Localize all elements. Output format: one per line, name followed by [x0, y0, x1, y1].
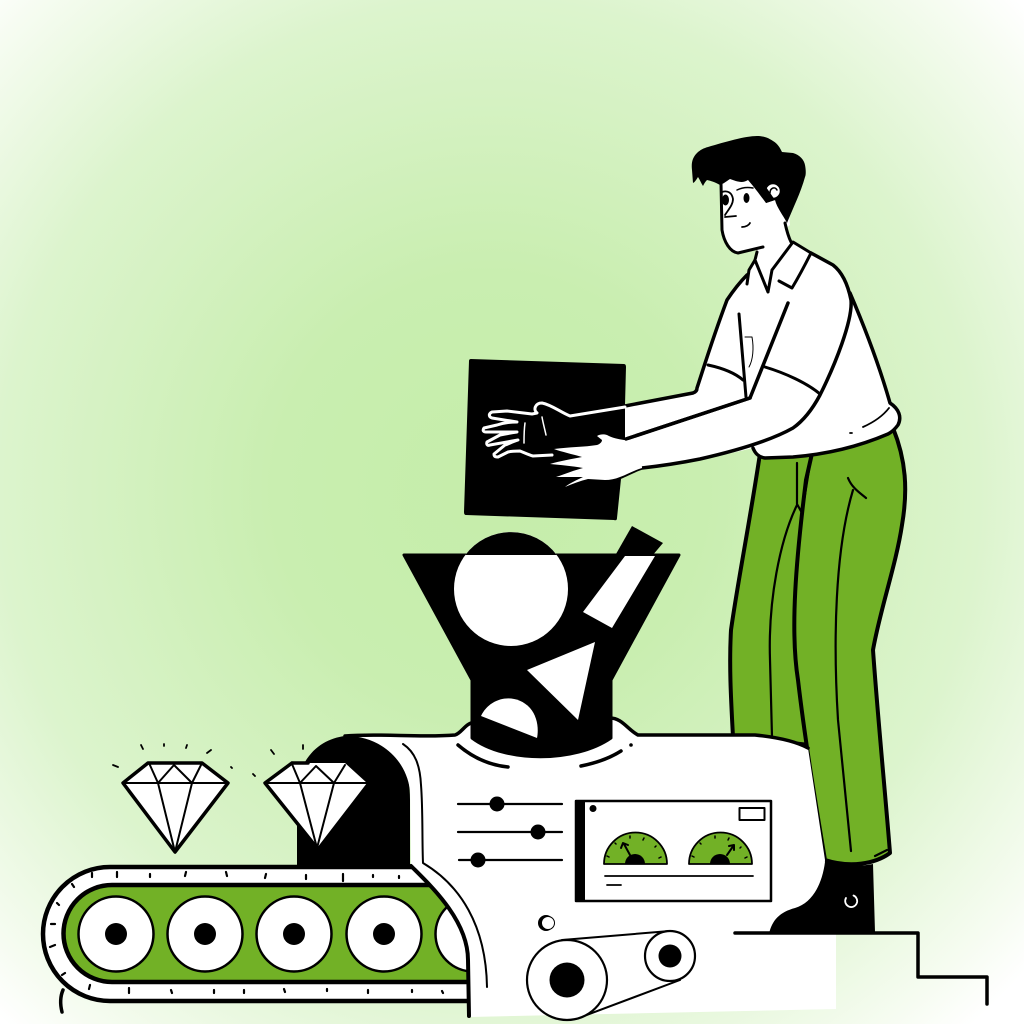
- sleeve cuffs: [708, 365, 820, 394]
- body top outline: [345, 718, 808, 748]
- rollers: [78, 896, 510, 972]
- left eye outline: [722, 191, 733, 215]
- hopper collar arcs: [458, 745, 621, 767]
- large pulley: [527, 940, 607, 1020]
- funnel body: [404, 555, 679, 757]
- circle shape: [454, 532, 568, 646]
- sparkles right: [253, 745, 303, 776]
- boot: [769, 860, 875, 934]
- hair lock over ear: [765, 187, 775, 203]
- man torso and arms: [621, 242, 900, 477]
- machine body: [345, 718, 836, 1017]
- half circle shape: [481, 698, 538, 738]
- shirt collar: [747, 242, 811, 292]
- back hand creases: [524, 417, 546, 443]
- black box held by the man: [464, 359, 642, 520]
- panel side strip: [575, 800, 585, 902]
- small pulley: [645, 931, 695, 981]
- body front edge: [411, 866, 469, 1016]
- steps: [735, 933, 987, 1004]
- face: [721, 170, 790, 253]
- placket: [739, 314, 746, 397]
- trouser folds: [770, 463, 887, 856]
- sliders: [458, 796, 562, 868]
- shirt and arm fill: [625, 242, 900, 469]
- back hand outline: [483, 403, 625, 457]
- inner seam: [403, 744, 487, 987]
- shirt back and hem outline: [753, 293, 900, 458]
- belt pulleys: [527, 931, 695, 1020]
- pocket: [745, 337, 753, 367]
- body shell: [345, 718, 836, 1017]
- shirt crease: [850, 408, 889, 433]
- diamond left: [123, 763, 228, 852]
- drive belt: [562, 931, 680, 1019]
- sparkles left: [113, 744, 232, 768]
- bar shape: [583, 556, 655, 628]
- front hand and forearm: [550, 434, 642, 487]
- face outline: [721, 183, 763, 253]
- circle top cap: [465, 532, 557, 555]
- black arch chute: [297, 736, 410, 866]
- back leg: [730, 440, 815, 745]
- eyebrow: [737, 187, 753, 190]
- front leg: [794, 428, 905, 864]
- ear: [765, 183, 781, 199]
- bar top cap: [616, 526, 663, 556]
- shoulder and sleeve outline: [621, 253, 851, 477]
- neck: [755, 220, 792, 290]
- belt inner green: [63, 885, 472, 982]
- right eye: [744, 193, 750, 203]
- small display: [740, 808, 764, 820]
- man head: [692, 136, 806, 290]
- rivet: [629, 743, 633, 747]
- triangle shape: [527, 642, 595, 720]
- hopper funnel: [404, 526, 679, 757]
- neck outlines: [755, 223, 791, 260]
- gauge right: [689, 833, 752, 864]
- belt ticks: [50, 872, 443, 993]
- back arm outline: [625, 275, 747, 406]
- forearm outline over box: [626, 398, 750, 439]
- indicator dot: [590, 805, 596, 812]
- panel frame: [576, 801, 771, 901]
- panel text lines: [605, 876, 753, 885]
- roller hubs: [105, 923, 395, 945]
- belt stand: [61, 990, 63, 1012]
- toggle knob: [538, 915, 554, 931]
- trousers: [730, 428, 905, 864]
- control panel: [575, 800, 771, 902]
- diamond right: [265, 763, 367, 848]
- arm upper edge: [626, 303, 788, 439]
- hair: [692, 136, 806, 223]
- nose line and mouth: [725, 216, 750, 227]
- belt outer: [43, 867, 470, 1001]
- conveyor belt: [43, 867, 510, 1012]
- gauge left: [604, 833, 667, 864]
- left eye: [722, 194, 729, 206]
